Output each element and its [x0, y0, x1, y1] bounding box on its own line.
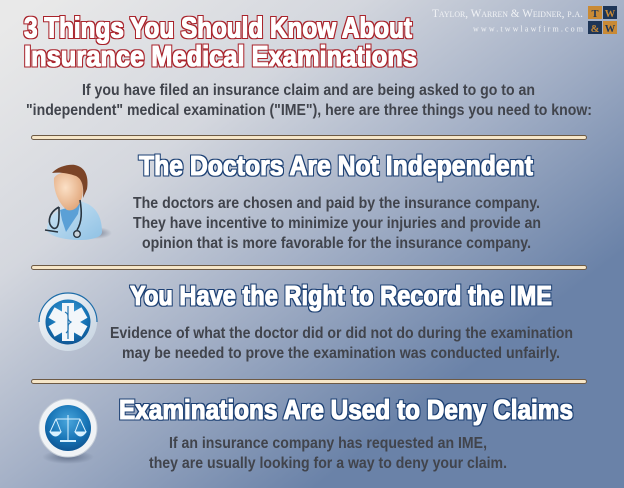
- intro text: [26, 82, 592, 119]
- firm logo: [432, 6, 617, 35]
- firm logo: &: [591, 24, 600, 35]
- title: Insurance Medical Examinations: [24, 41, 417, 73]
- firm logo: W: [605, 9, 616, 20]
- heading: doctors: The Doctors Are Not Independent: [139, 150, 533, 181]
- icon: scales: [39, 399, 97, 464]
- body: deny: If an insurance company has requested an IME,: [169, 435, 487, 452]
- body: record: may be needed to prove the examination was conducted unfairly.: [122, 345, 560, 362]
- title: 3 Things You Should Know About: [24, 12, 412, 44]
- body: record: Evidence of what the doctor did or did not do during the examination: [110, 325, 573, 342]
- icon: doctor: [45, 165, 112, 240]
- firm logo: T: [591, 9, 599, 20]
- firm logo: W: [605, 24, 616, 35]
- title: [24, 12, 417, 73]
- firm logo: Taylor, Warren & Weidner, p.a.: [432, 8, 583, 20]
- body: deny: they are usually looking for a way to deny your claim.: [149, 455, 507, 472]
- body: deny: [149, 435, 507, 472]
- body: doctors: The doctors are chosen and paid by the insurance company.: [133, 195, 540, 212]
- icon: star of life: [39, 293, 97, 351]
- body: doctors: opinion that is more favorable for the insurance company.: [142, 235, 531, 252]
- body: record: [110, 325, 573, 362]
- body: doctors: [133, 195, 541, 252]
- intro text: If you have filed an insurance claim and are being asked to go to an: [82, 82, 535, 99]
- heading: record: You Have the Right to Record the IME: [130, 280, 552, 311]
- firm logo: www.twwlawfirm.com: [473, 24, 584, 34]
- body: doctors: They have incentive to minimize your injuries and provide an: [133, 215, 541, 232]
